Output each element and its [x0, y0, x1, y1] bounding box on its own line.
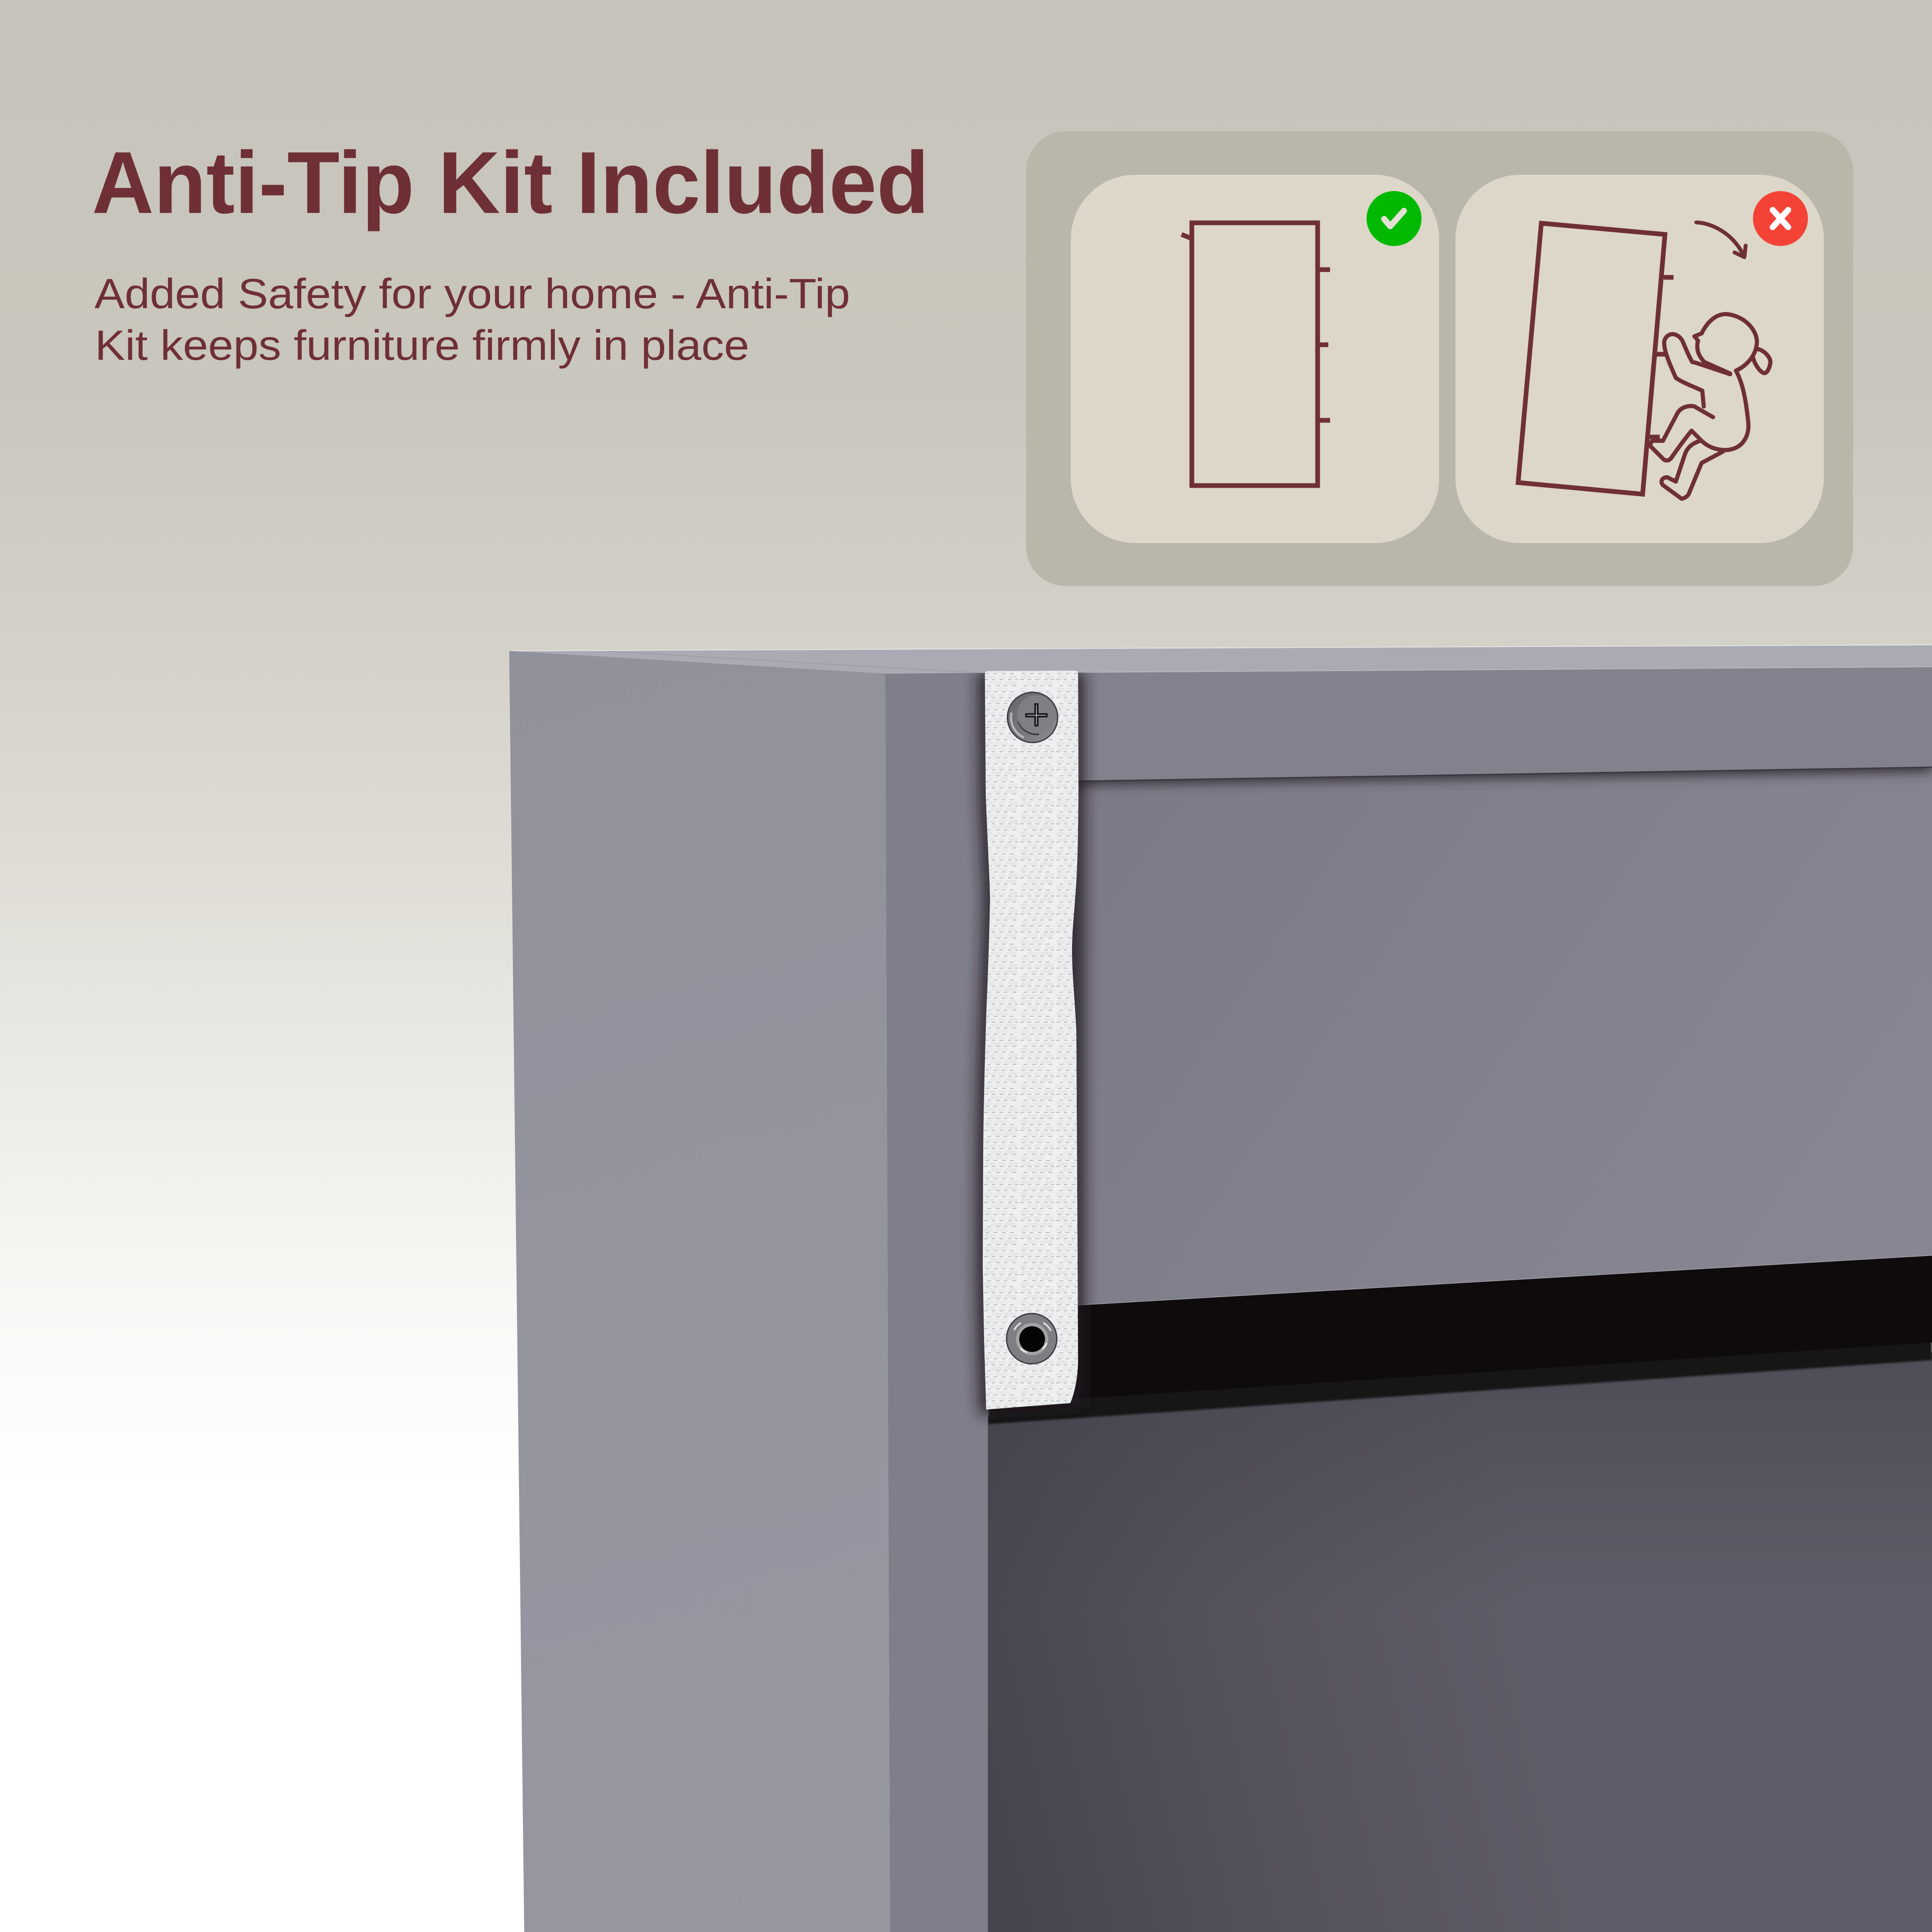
cabinet interior shelf back — [988, 1352, 1932, 1932]
heading: Anti-Tip Kit Included: Anti-Tip Kit Included — [92, 134, 929, 232]
recessed door panel — [988, 763, 1932, 1310]
cabinet side panel — [509, 651, 890, 1932]
front stile — [885, 673, 988, 1932]
description line 1: Added Safety for your home - Anti-Tip — [94, 270, 850, 317]
cabinet top surface — [509, 645, 1932, 674]
icon: climbing child — [1650, 314, 1771, 499]
cabinet — [509, 645, 1932, 1932]
icon: tipping arrow — [1696, 222, 1746, 257]
black gap below door — [988, 1255, 1932, 1405]
panel: safety comparison icons — [1026, 131, 1853, 586]
screw — [1007, 692, 1058, 743]
strap shadow — [975, 671, 1085, 1415]
anti-tip strap — [983, 671, 1078, 1410]
card background — [1455, 175, 1824, 543]
description line 2: Kit keeps furniture firmly in place — [95, 322, 749, 369]
eyelet — [1006, 1313, 1057, 1364]
panel background — [1026, 131, 1853, 586]
icon: upright cabinet with anchors — [1182, 223, 1330, 486]
top rail — [885, 667, 1932, 783]
card: tipping furniture hazard — [1455, 175, 1824, 543]
icon: tilted cabinet — [1518, 223, 1674, 494]
description text — [94, 270, 850, 369]
card: anchored furniture — [1071, 175, 1439, 543]
dark shelf underside — [988, 1335, 1932, 1424]
icon: green check badge — [1367, 191, 1422, 246]
card background — [1071, 175, 1439, 543]
icon: red cross badge — [1753, 191, 1808, 246]
